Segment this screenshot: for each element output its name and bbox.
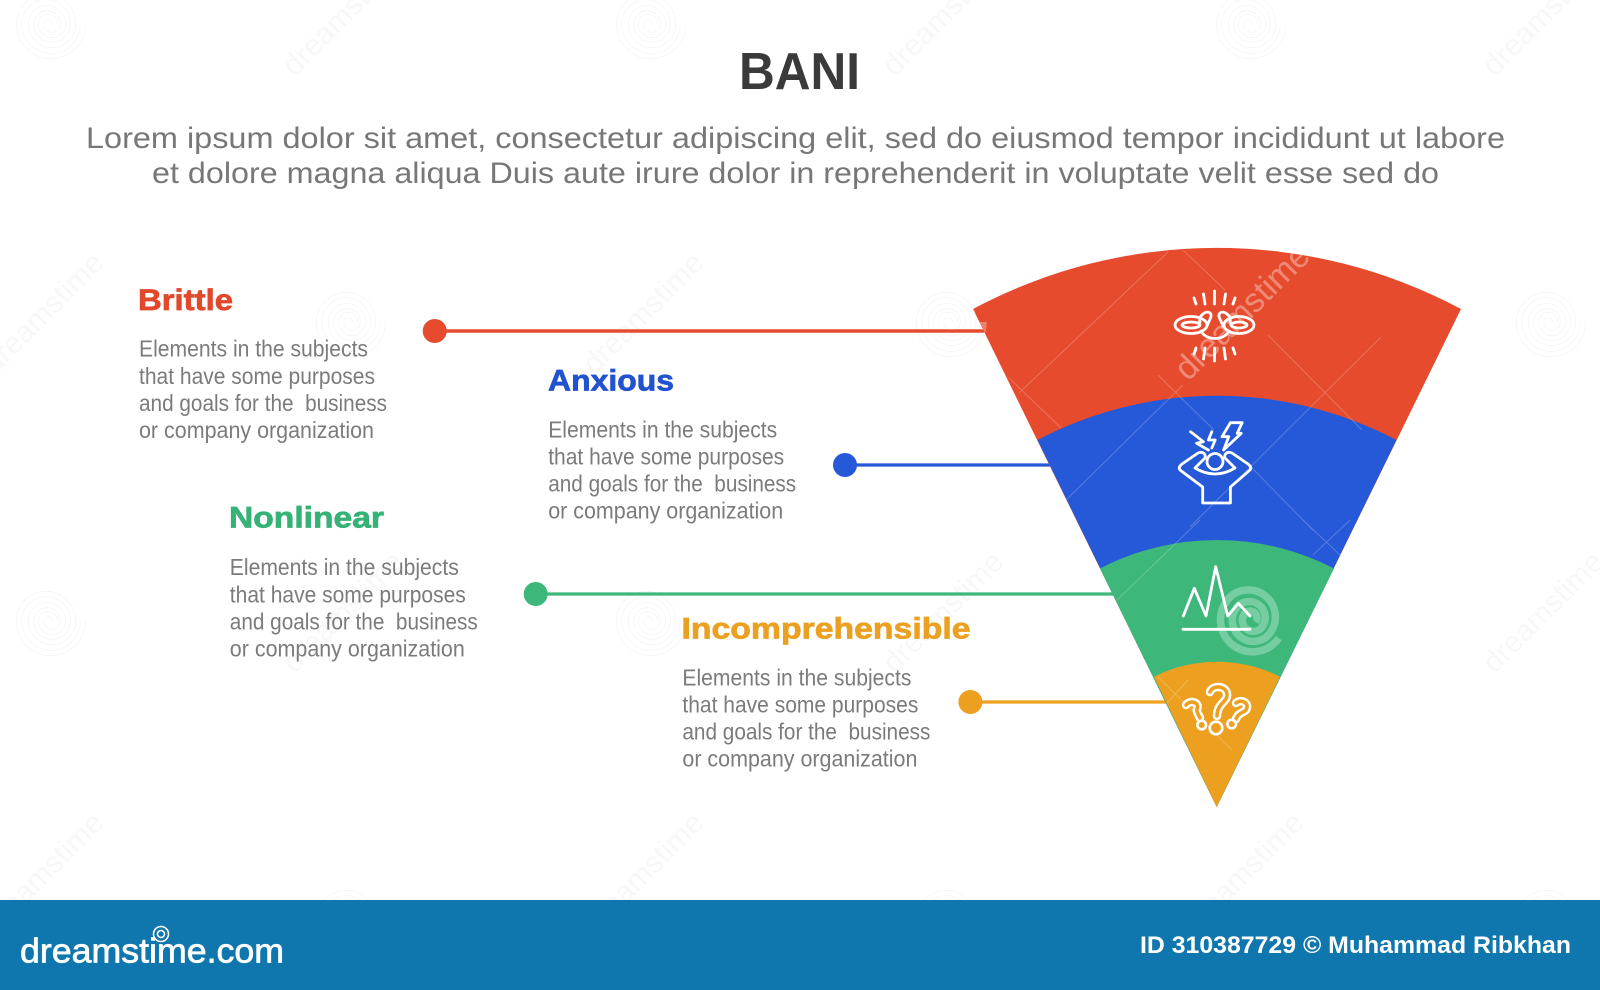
body: nonlinear: or company organization xyxy=(230,635,465,661)
body: anxious: or company organization xyxy=(548,498,783,524)
body: brittle: or company organization xyxy=(139,417,374,443)
subtitle xyxy=(86,122,1505,190)
icon: broken chain xyxy=(1175,291,1254,361)
connector: nonlinear xyxy=(524,582,1115,606)
body: brittle: and goals for the business xyxy=(139,390,387,416)
segment: incomprehensible xyxy=(1154,662,1280,807)
body: nonlinear: and goals for the business xyxy=(230,608,478,634)
icon: anxious person xyxy=(1179,423,1251,503)
icon: question marks xyxy=(1186,687,1247,734)
body: incomprehensible xyxy=(682,664,930,772)
connector: incomprehensible xyxy=(958,690,1170,714)
segment: nonlinear xyxy=(1100,540,1334,807)
body: nonlinear xyxy=(230,554,478,661)
footer bar xyxy=(0,900,1600,990)
body: brittle xyxy=(139,336,387,443)
title: BANI xyxy=(739,43,860,101)
body: anxious: Elements in the subjects xyxy=(548,416,777,442)
footer logo spiral xyxy=(154,926,168,942)
heading: nonlinear: Nonlinear xyxy=(229,502,384,535)
watermark over wedge: dreamstime xyxy=(1167,237,1318,388)
heading: incomprehensible: Incomprehensible xyxy=(682,612,970,646)
watermark pattern: dreamstime xyxy=(576,806,710,940)
watermark pattern: dreamstime xyxy=(576,246,710,380)
subtitle: et dolore magna aliqua Duis aute irure dolor in reprehenderit in voluptate velit esse sed do xyxy=(152,157,1439,190)
text block: brittle xyxy=(138,284,387,443)
footer logo text: dreamstime.com xyxy=(20,932,284,970)
segment: anxious xyxy=(1038,396,1396,807)
body: brittle: that have some purposes xyxy=(139,363,375,389)
body: nonlinear: that have some purposes xyxy=(230,581,466,607)
heading: brittle: Brittle xyxy=(138,284,233,317)
watermark pattern: dreamstime xyxy=(276,545,410,679)
footer credit: ID 310387729 © Muhammad Ribkhan xyxy=(1140,932,1571,959)
text block: anxious xyxy=(548,365,796,524)
watermark pattern: dreamstime xyxy=(1176,806,1310,940)
watermark over wedge xyxy=(973,250,1382,750)
segment: brittle xyxy=(973,248,1461,807)
body: nonlinear: Elements in the subjects xyxy=(230,554,459,580)
watermark pattern: dreamstime xyxy=(876,545,1010,679)
body: brittle: Elements in the subjects xyxy=(139,336,368,362)
body: anxious xyxy=(548,416,796,524)
connector: brittle xyxy=(423,319,985,343)
icon: nonlinear chart xyxy=(1183,567,1250,629)
text block: incomprehensible xyxy=(682,612,970,772)
funnel wedge xyxy=(973,248,1461,807)
heading: anxious: Anxious xyxy=(548,365,674,398)
body: anxious: that have some purposes xyxy=(548,444,784,470)
body: incomprehensible: or company organization xyxy=(682,746,917,772)
text block: nonlinear xyxy=(229,502,478,661)
body: incomprehensible: and goals for the business xyxy=(682,719,930,745)
connector: anxious xyxy=(833,453,1055,477)
body: incomprehensible: that have some purposes xyxy=(682,692,918,718)
body: incomprehensible: Elements in the subjects xyxy=(682,664,911,690)
subtitle: Lorem ipsum dolor sit amet, consectetur adipiscing elit, sed do eiusmod tempor incididunt ut labore xyxy=(86,122,1505,155)
body: anxious: and goals for the business xyxy=(548,471,796,497)
